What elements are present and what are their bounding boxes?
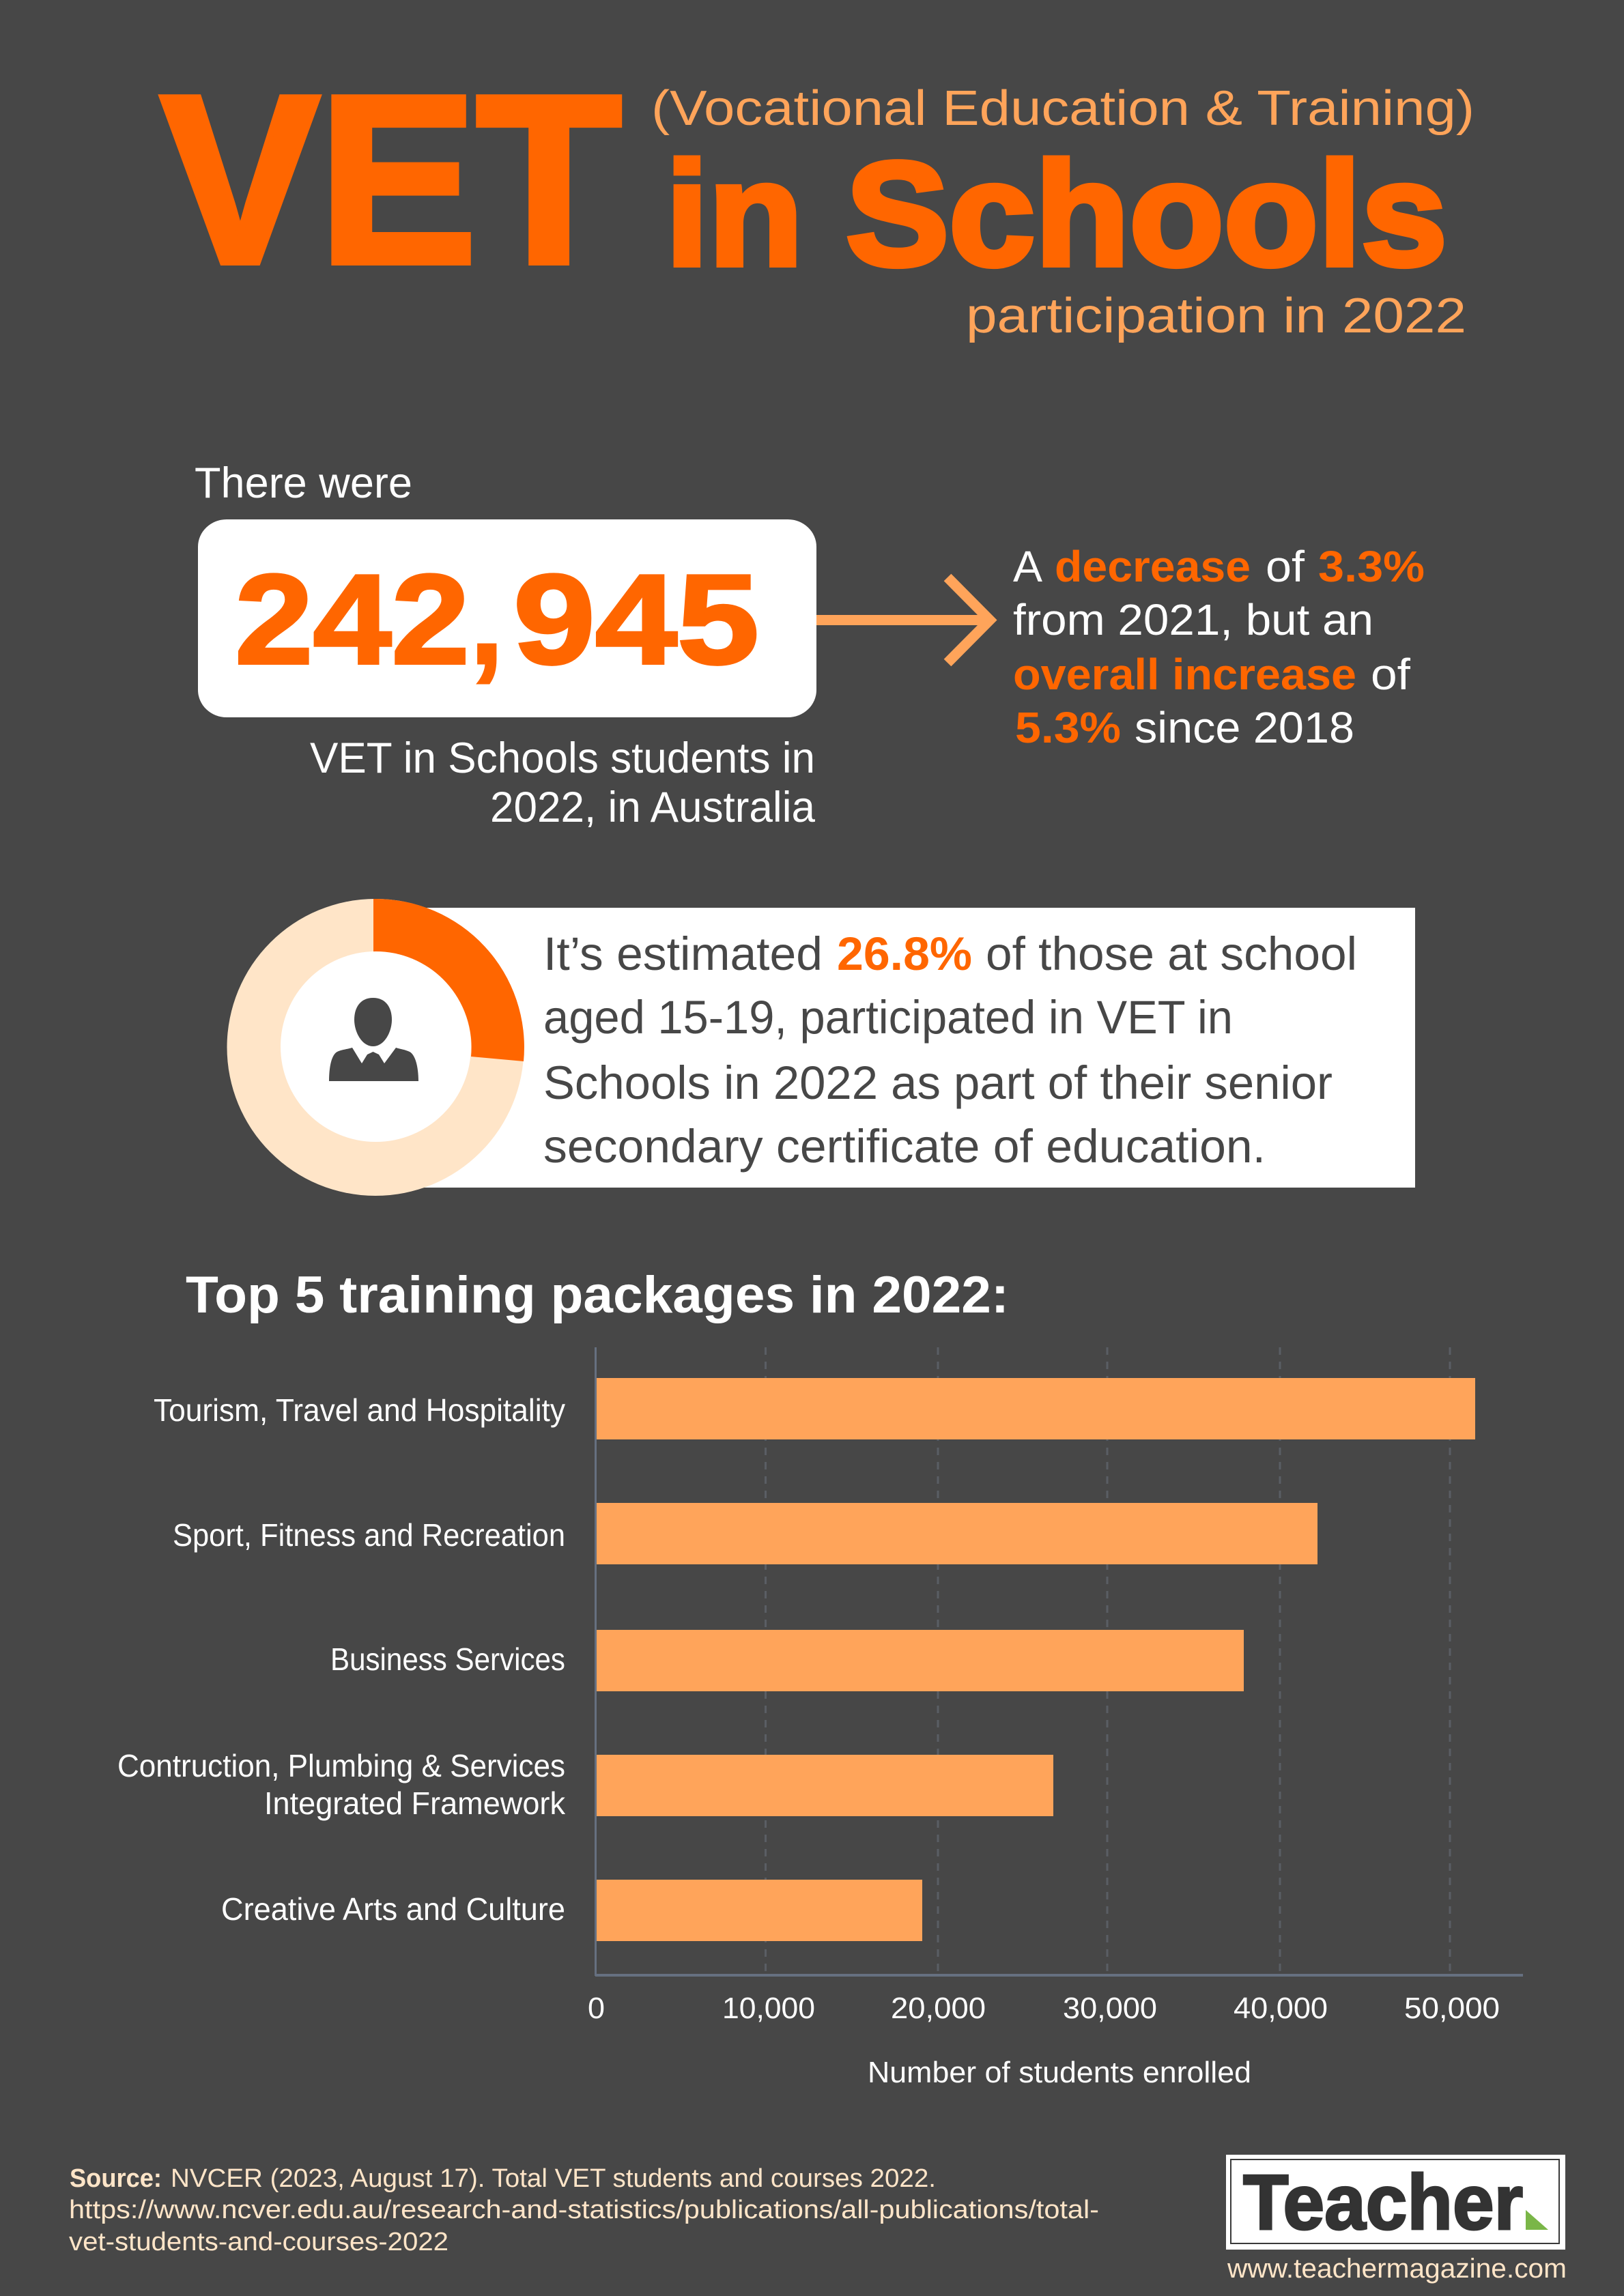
stat: 242,945	[235, 548, 759, 691]
subtitle: participation in 2022: participation in 2022	[966, 289, 1466, 343]
source	[69, 2164, 1099, 2256]
x axis tick labels	[588, 1992, 1500, 2025]
category labels: Tourism, Travel and Hospitality	[154, 1392, 565, 1428]
bars	[597, 1378, 1475, 1941]
website: www.teachermagazine.com	[1227, 2254, 1567, 2284]
line 3: overall increase	[1013, 650, 1356, 699]
line 1: of	[1266, 542, 1305, 591]
icon: person	[329, 998, 418, 1081]
arrow	[816, 577, 990, 663]
line 1	[1013, 542, 1425, 591]
logo: Teacher: Teacher	[1243, 2159, 1523, 2246]
stat: 242,945: 945	[513, 548, 759, 691]
text card	[375, 908, 1415, 1188]
title: VET: VET	[161, 46, 621, 313]
stat: 242,945: 242	[235, 548, 470, 691]
source: https://www.ncver.edu.au/research-and-statistics/publications/all-publications/total-	[69, 2196, 1099, 2224]
stat card	[198, 519, 816, 717]
participation text: secondary certificate of education.	[543, 1120, 1266, 1173]
x axis tick labels: 50,000	[1404, 1992, 1500, 2025]
x axis tick labels: 40,000	[1234, 1992, 1328, 2025]
source: NVCER (2023, August 17). Total VET students and courses 2022.	[171, 2164, 936, 2193]
participation text: aged 15-19, participated in VET in	[543, 991, 1233, 1044]
line 2: from 2021, but an	[1013, 595, 1373, 644]
category labels: Business Services	[330, 1641, 565, 1677]
axis lines	[595, 1347, 1523, 1976]
source: Source:	[70, 2164, 162, 2193]
heading: top 5 training packages: Top 5 training packages in 2022:	[186, 1266, 1009, 1324]
donut chart	[227, 899, 524, 1196]
line 1: decrease	[1055, 542, 1251, 591]
category labels: Integrated Framework	[264, 1785, 566, 1821]
category labels: Creative Arts and Culture	[221, 1891, 565, 1927]
title: in Schools: in Schools	[666, 131, 1447, 296]
title: vocational education and training: (Vocational Education & Training)	[651, 81, 1475, 136]
text: there were: There were	[195, 459, 412, 507]
text: students caption line 1: VET in Schools students in	[310, 734, 815, 782]
participation text: It’s estimated	[543, 928, 823, 980]
line 4	[1015, 703, 1354, 752]
participation text: of those at school	[986, 928, 1357, 980]
x axis tick labels: 30,000	[1063, 1992, 1157, 2025]
line 3: of	[1371, 650, 1410, 699]
x axis tick labels: 0	[588, 1992, 605, 2025]
participation text: Schools in 2022 as part of their senior	[543, 1057, 1333, 1109]
x axis tick labels: 10,000	[722, 1992, 815, 2025]
text: students caption line 2: 2022, in Australia	[490, 784, 816, 831]
category labels: Sport, Fitness and Recreation	[173, 1517, 565, 1553]
title	[161, 46, 1475, 343]
line 4: since 2018	[1135, 703, 1354, 752]
x axis title: Number of students enrolled	[868, 2056, 1251, 2089]
panel: change over time	[1013, 542, 1425, 752]
participation text	[543, 928, 1357, 1173]
line 1: 3.3%	[1318, 542, 1425, 591]
line 4: 5.3%	[1015, 703, 1121, 752]
bar chart	[117, 1347, 1523, 2089]
line 1: A	[1013, 542, 1042, 591]
category labels	[117, 1392, 566, 1927]
category labels: Contruction, Plumbing & Services	[117, 1748, 565, 1783]
participation text: 26.8%	[837, 928, 972, 980]
source: vet-students-and-courses-2022	[69, 2228, 448, 2256]
stat: 242,945: ,	[470, 548, 504, 691]
x axis tick labels: 20,000	[891, 1992, 986, 2025]
panel: participation rate	[227, 899, 1415, 1196]
panel: total students	[195, 459, 816, 831]
